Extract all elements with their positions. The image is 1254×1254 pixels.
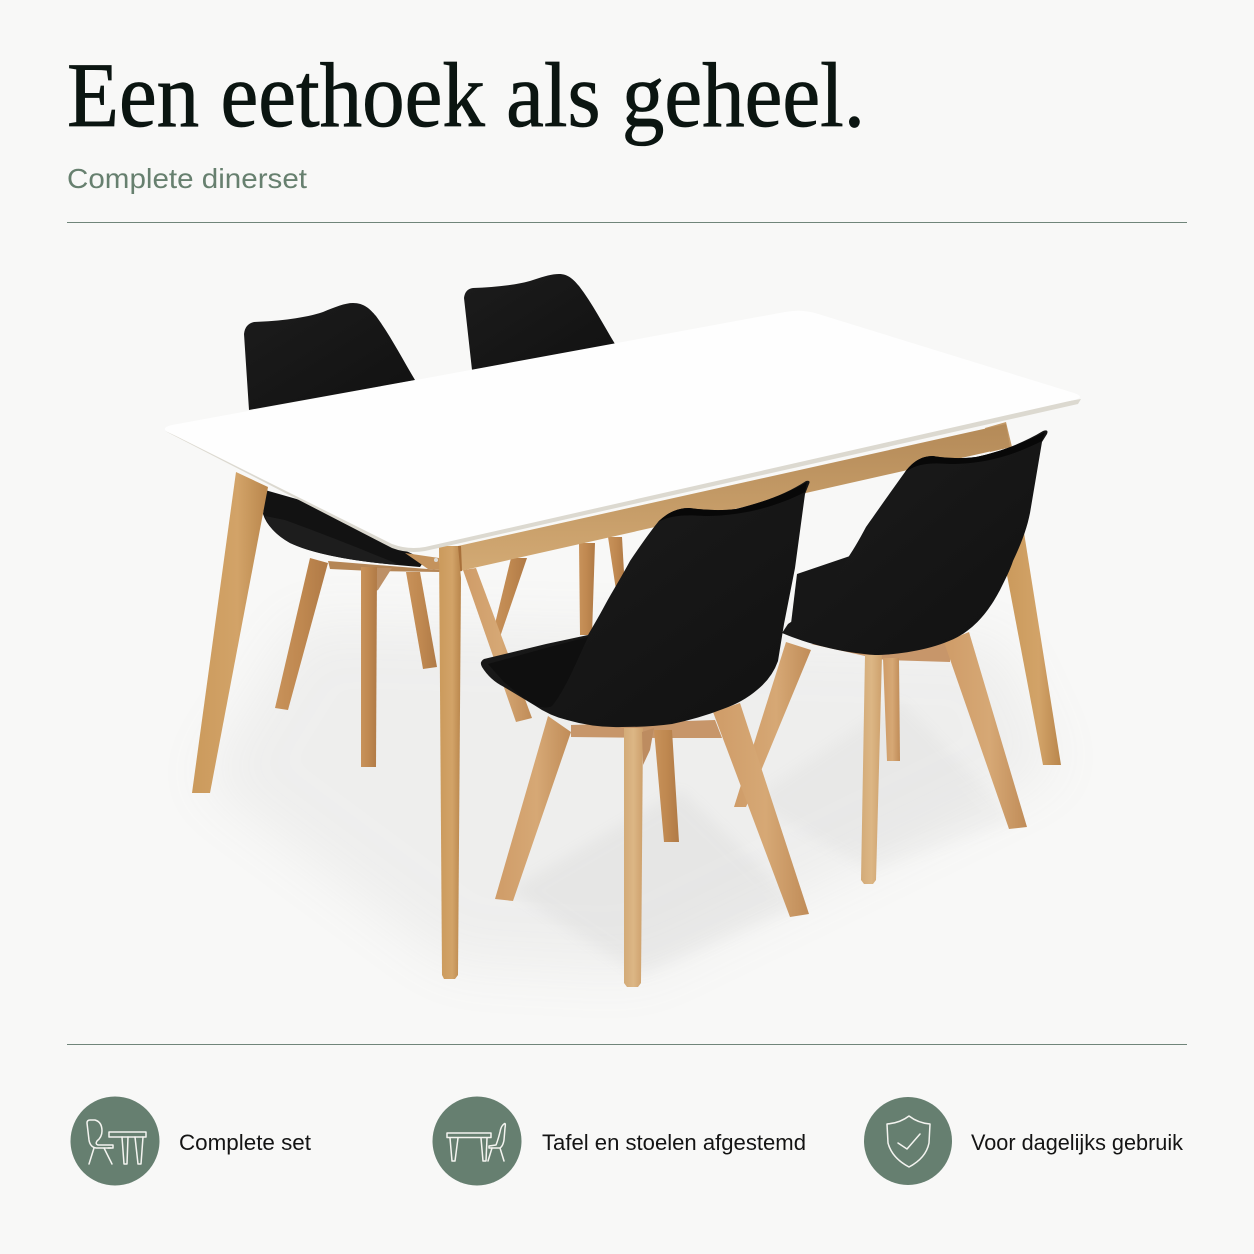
label: daily use: Voor dagelijks gebruik [971, 1130, 1184, 1155]
back left chair [244, 303, 440, 767]
icon: shield with check [864, 1097, 952, 1185]
icon: chair and table [70, 1096, 160, 1186]
table top [165, 311, 1081, 552]
title: Een eethoek als geheel. [67, 44, 865, 146]
feature: complete set [70, 1096, 311, 1186]
back right chair [463, 274, 625, 722]
table apron [405, 424, 1010, 572]
right front chair [734, 430, 1048, 884]
label: table and chairs: Tafel en stoelen afgestemd [542, 1130, 806, 1155]
icon: table and chair [432, 1096, 522, 1186]
subtitle: Complete dinerset [67, 163, 307, 194]
label: complete set: Complete set [179, 1130, 311, 1155]
floor shadows [200, 620, 1060, 975]
feature: daily use [864, 1097, 1184, 1185]
dining set illustration [165, 274, 1081, 987]
front table leg [439, 546, 461, 979]
left front chair [481, 481, 810, 987]
table legs [192, 422, 1061, 793]
feature: table and chairs [432, 1096, 806, 1186]
